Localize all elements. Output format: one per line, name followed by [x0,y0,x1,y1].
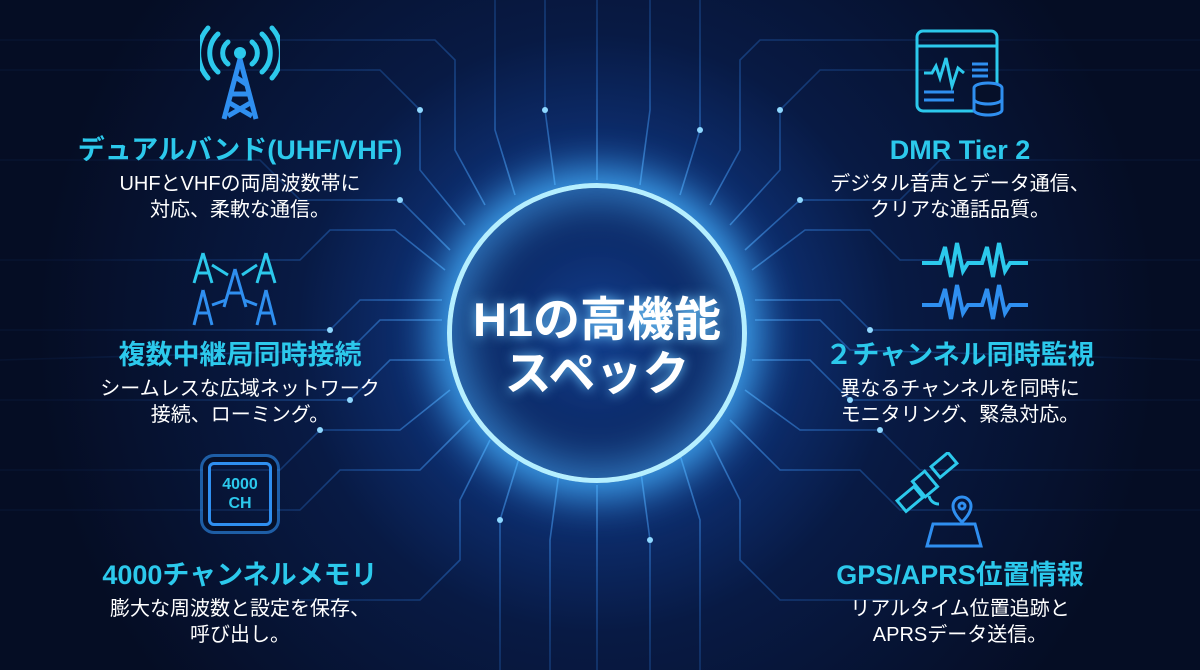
icon: chip 4000CH: 4000 [222,476,258,493]
feature: GPS/APRS: リアルタイム位置追跡と [850,598,1070,620]
feature: 4000 channels [102,560,378,646]
feature: dual watch: ２チャンネル同時監視 [825,340,1095,370]
feature: 4000 channels: 膨大な周波数と設定を保存、 [110,598,370,620]
icon: DMR screen [916,30,1004,116]
icon: multiple towers [192,252,276,326]
feature: dual band: 対応、柔軟な通信。 [150,199,330,221]
feature: dual watch: モニタリング、緊急対応。 [841,404,1079,426]
feature: 4000 channels: 4000チャンネルメモリ [102,560,378,590]
feature: DMR [830,135,1090,221]
feature: 4000 channels: 呼び出し。 [190,624,290,646]
feature: dual band: UHFとVHFの両周波数帯に [119,173,361,195]
center title [468,288,726,400]
feature: dual watch: 異なるチャンネルを同時に [840,378,1080,400]
icon: chip 4000CH: CH [228,495,252,512]
feature: multi repeater: 複数中継局同時接続 [118,340,362,370]
feature: DMR: デジタル音声とデータ通信、 [830,173,1090,195]
feature: multi repeater: シームレスな広域ネットワーク [100,378,380,400]
feature: DMR: クリアな通話品質。 [870,199,1050,221]
feature: GPS/APRS: APRSデータ送信。 [873,624,1047,646]
feature: DMR: DMR Tier 2 [890,135,1030,165]
feature: GPS/APRS [836,560,1084,646]
feature: multi repeater: 接続、ローミング。 [151,404,329,426]
center title: H1の高機能 [473,293,721,346]
center title: スペック [505,347,689,400]
feature: dual band [78,135,402,221]
icon: chip 4000CH [208,462,272,526]
icon: satellite gps [895,452,983,548]
central circle [447,183,747,483]
icon: radio tower [200,26,280,120]
icon: dual waveform [922,242,1028,320]
feature: GPS/APRS: GPS/APRS位置情報 [836,560,1084,590]
feature: dual watch [825,340,1095,426]
feature: multi repeater [100,340,380,426]
feature: dual band: デュアルバンド(UHF/VHF) [78,135,402,165]
